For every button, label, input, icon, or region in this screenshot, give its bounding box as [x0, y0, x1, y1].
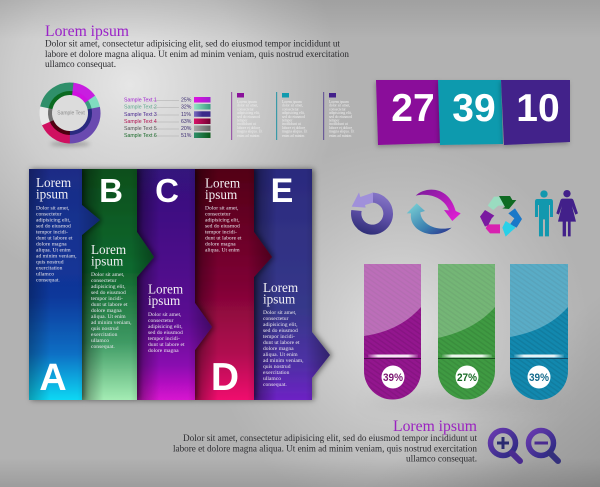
text column 1: adipisicing elit, — [237, 111, 260, 116]
text column 2: adipisicing elit, — [282, 111, 305, 116]
band E: consectetur — [263, 316, 289, 322]
band A: ullamco — [36, 272, 54, 278]
band E: ipsum — [263, 292, 296, 306]
band C: Dolor sit amet, — [148, 312, 182, 318]
text column 2: labore et dolore — [282, 126, 306, 130]
band B: tempor incidi- — [91, 296, 123, 302]
band D: consectetur — [205, 212, 231, 218]
band E: exercitation — [263, 370, 290, 376]
legend — [124, 97, 210, 139]
tile 39 — [438, 80, 503, 145]
legend row 1: Sample Text 1 — [124, 98, 157, 104]
band A: Lorem — [36, 175, 72, 190]
text column 1: magna aliqua. Ut — [237, 130, 262, 134]
band C: Lorem — [148, 282, 184, 296]
text column 1: tempor — [237, 118, 248, 122]
text column 3 — [323, 92, 354, 140]
band D: Dolor sit amet, — [205, 206, 239, 212]
legend row 5 — [124, 126, 210, 132]
band E: ullamco — [263, 376, 281, 382]
band C: dunt ut labore et — [148, 342, 185, 348]
band A: adipisicing elit, — [36, 218, 71, 224]
text column 2: sed do eiusmod — [282, 115, 305, 119]
band B — [82, 169, 154, 400]
band D: Lorem — [205, 176, 241, 190]
band E: E — [271, 172, 293, 210]
text column 2: enim ad minim — [282, 134, 304, 138]
title: bottom heading: Lorem ipsum — [393, 418, 477, 435]
text column 1 — [231, 92, 262, 140]
band B: consectetur — [91, 278, 117, 284]
band D: ipsum — [205, 187, 238, 202]
pill gauge: purple 39%: 39% — [383, 372, 403, 384]
bottom text block — [173, 418, 477, 464]
band A: ipsum — [36, 186, 69, 202]
band B: ad minim veniam, — [91, 320, 132, 326]
legend row 1: 25% — [181, 98, 192, 104]
text column 3: tempor — [329, 118, 340, 122]
band C — [137, 169, 212, 400]
text column 2: tempor — [282, 118, 293, 122]
text column 3: labore et dolore — [329, 126, 353, 130]
donut center label: Sample Text — [57, 110, 85, 116]
band E: sed do eiusmod — [263, 328, 298, 334]
legend row 1 — [124, 97, 210, 104]
legend row 2: 32% — [181, 104, 192, 110]
text column 3: enim ad minim — [329, 134, 351, 138]
band B: exercitation — [91, 332, 118, 338]
band C: ipsum — [148, 293, 181, 308]
legend row 6: Sample Text 6 — [124, 133, 157, 139]
legend row 3: 11% — [181, 112, 191, 118]
band A: aliqua. Ut enim — [36, 248, 71, 254]
tile 10: 10 — [516, 87, 560, 130]
band E: consequat. — [263, 382, 287, 388]
text column 3: magna aliqua. Ut — [329, 130, 354, 134]
text column 3: sed do eiusmod — [329, 115, 352, 119]
text column 1: consectetur — [237, 107, 255, 111]
band C: adipisicing elit, — [148, 324, 183, 330]
text column 1: dolor sit amet, — [237, 104, 258, 109]
panel: vertical ribbon bands — [29, 169, 330, 400]
text column 1: incididunt ut — [237, 122, 256, 126]
band B: B — [99, 172, 123, 209]
band E — [254, 169, 330, 400]
text column 2: consectetur — [282, 107, 300, 111]
band E: dolore magna — [263, 346, 294, 352]
legend row 6 — [124, 132, 210, 139]
band B: quis nostrud — [91, 326, 119, 332]
band C: consectetur — [148, 318, 174, 324]
band A — [29, 169, 100, 400]
donut chart — [34, 77, 106, 149]
text column 2: incididunt ut — [282, 122, 301, 126]
band D: dunt ut labore et — [205, 236, 242, 242]
text column 2: magna aliqua. Ut — [282, 130, 307, 134]
number tiles — [376, 80, 570, 145]
band E: Dolor sit amet, — [263, 310, 297, 316]
tile 10 — [501, 80, 570, 145]
pill gauge: purple 39% — [364, 264, 421, 400]
band B: Lorem — [91, 242, 127, 257]
band B: consequat. — [91, 344, 115, 350]
band E: Lorem — [263, 280, 299, 295]
tile 39: 39 — [452, 87, 496, 130]
legend row 6: 51% — [181, 133, 192, 139]
band E: quis nostrud — [263, 364, 291, 370]
band E: dunt ut labore et — [263, 340, 300, 346]
text block: bottom description: ullamco consequat. — [406, 454, 477, 464]
legend row 3: Sample Text 3 — [124, 112, 157, 118]
band A: dolore magna — [36, 242, 67, 248]
text column 3: consectetur — [329, 107, 347, 111]
legend row 5: 20% — [181, 126, 192, 132]
text block: bottom description: Dolor sit amet, consectetur adipisicing elit, sed do eiusmod tempor incididunt ut — [183, 434, 477, 444]
band C: dolore magna — [148, 348, 179, 354]
text block: top description: labore et dolore magna aliqua. Ut enim ad minim veniam, quis nostrud exercitation — [45, 50, 349, 60]
band B: ipsum — [91, 254, 124, 268]
icon: circular arrow — [351, 192, 393, 235]
band C: tempor incidi- — [148, 336, 180, 342]
band D: aliqua. Ut enim — [205, 248, 240, 254]
pill gauge: blue 39%: 39% — [529, 372, 549, 384]
pill gauge: green 27%: 27% — [457, 372, 477, 384]
band D: dolore magna — [205, 242, 236, 248]
text column 1: Lorem ipsum — [237, 100, 257, 104]
band D: D — [211, 356, 239, 399]
legend row 4 — [124, 118, 210, 125]
icon: recycle symbol — [480, 196, 522, 237]
band A: exercitation — [36, 266, 63, 272]
pill gauge: blue 39% — [510, 264, 568, 400]
text column 1: labore et dolore — [237, 126, 261, 130]
text block: top description: ullamco consequat. — [45, 60, 116, 70]
band B: sed do eiusmod — [91, 290, 126, 296]
band E: adipisicing elit, — [263, 322, 298, 328]
text column 2 — [276, 92, 307, 140]
band E: ad minim veniam, — [263, 358, 304, 364]
text block: bottom description — [173, 434, 477, 464]
icon: two-arrow refresh — [407, 190, 461, 234]
band A: consectetur — [36, 212, 62, 218]
legend row 3 — [124, 111, 210, 118]
legend row 4: Sample Text 4 — [124, 119, 157, 125]
text column 2: dolor sit amet, — [282, 104, 303, 109]
band C: sed do eiusmod — [148, 330, 183, 336]
band A: tempor incidi- — [36, 230, 68, 236]
band B: dolore magna — [91, 308, 122, 314]
legend row 2 — [124, 104, 210, 110]
text block: top description — [45, 40, 349, 70]
text column 1: sed do eiusmod — [237, 115, 260, 119]
text column 3: Lorem ipsum — [329, 100, 349, 104]
legend row 2: Sample Text 2 — [124, 104, 157, 110]
band A: consequat. — [36, 278, 60, 284]
band A: Dolor sit amet, — [36, 206, 70, 212]
top heading block — [45, 23, 349, 70]
band A: ad minim veniam, — [36, 254, 77, 260]
band B: adipisicing elit, — [91, 284, 126, 290]
band E: tempor incidi- — [263, 334, 295, 340]
band B: ullamco — [91, 338, 109, 344]
text block: bottom description: labore et dolore magna aliqua. Ut enim ad minim veniam, quis nostrud exercitation — [173, 444, 477, 454]
pill shadow — [366, 397, 566, 407]
icon: zoom out — [528, 430, 558, 461]
band B: dunt ut labore et — [91, 302, 128, 308]
text column 3: dolor sit amet, — [329, 104, 350, 109]
band A: quis nostrud — [36, 260, 64, 266]
tile 27 — [376, 80, 441, 145]
tile 27: 27 — [391, 87, 435, 130]
band E: aliqua. Ut enim — [263, 352, 298, 358]
text column 1: enim ad minim — [237, 134, 259, 138]
icon: man figure — [535, 190, 553, 236]
band D: tempor incidi- — [205, 230, 237, 236]
band A: sed do eiusmod — [36, 224, 71, 230]
title: top heading: Lorem ipsum — [45, 23, 129, 40]
band A: A — [39, 357, 67, 399]
text column 3: adipisicing elit, — [329, 111, 352, 116]
text block: top description: Dolor sit amet, consectetur adipisicing elit, sed do eiusmod tempor incididunt ut — [45, 40, 340, 50]
icon: zoom in — [490, 430, 520, 461]
band D: adipisicing elit, — [205, 218, 240, 224]
text column 3: incididunt ut — [329, 122, 348, 126]
band D: sed do eiusmod — [205, 224, 240, 230]
band C: C — [155, 172, 179, 209]
band A: dunt ut labore et — [36, 236, 73, 242]
icon: woman figure — [556, 190, 578, 236]
legend row 4: 63% — [181, 119, 192, 125]
pill gauge: green 27% — [438, 264, 495, 400]
text column 2: Lorem ipsum — [282, 100, 302, 104]
legend row 5: Sample Text 5 — [124, 126, 157, 132]
band B: aliqua. Ut enim — [91, 314, 126, 320]
band D — [195, 169, 272, 400]
band B: Dolor sit amet, — [91, 272, 125, 278]
